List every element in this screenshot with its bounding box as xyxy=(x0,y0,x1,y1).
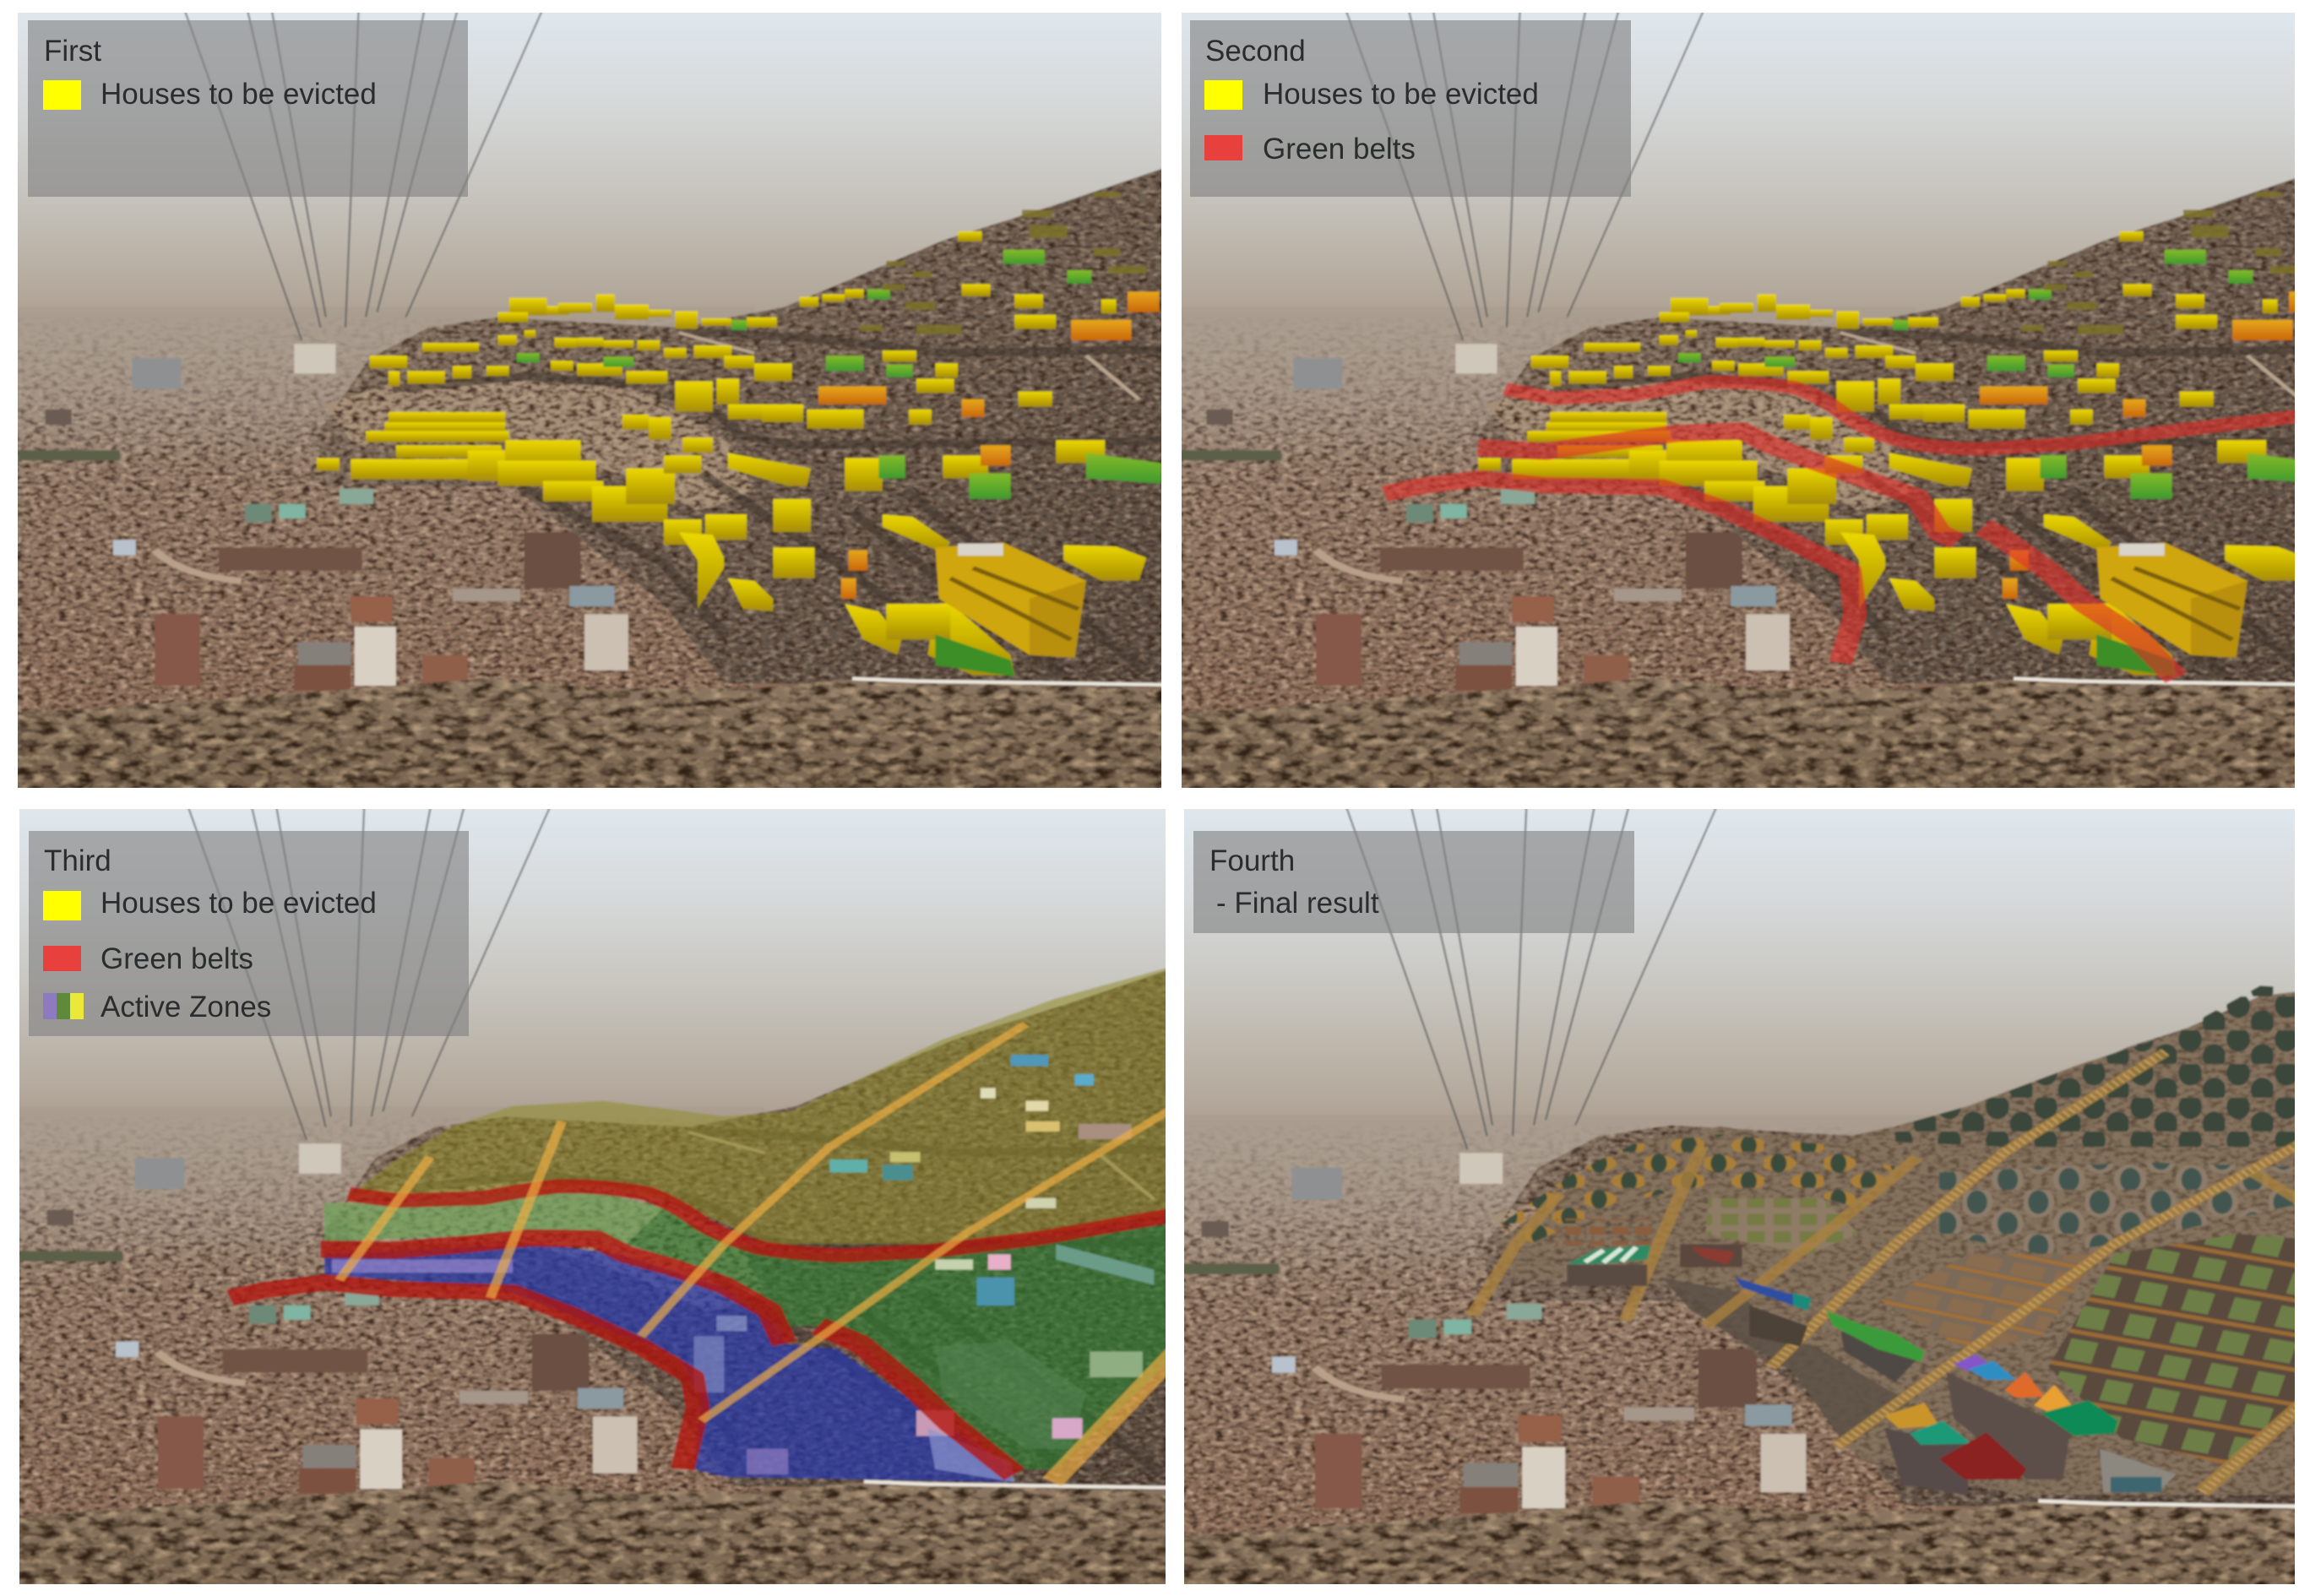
mid-slope trees xyxy=(1939,1162,2304,1254)
restored slope xyxy=(1494,991,2304,1495)
legend: Third: Green belts xyxy=(101,942,253,975)
green belts overlay xyxy=(1384,383,2304,678)
active zones overlay xyxy=(230,965,1177,1482)
orange terraced trees xyxy=(1494,1134,1895,1244)
teal and pale houses xyxy=(332,1055,1154,1482)
legend: Second: Second xyxy=(1205,35,1306,68)
legend: Fourth: - Final result xyxy=(1216,887,1379,920)
circulation stripes xyxy=(340,1024,1177,1482)
tree-covered upper slope xyxy=(1895,985,2304,1147)
legend: Fourth xyxy=(1193,831,1634,933)
stairs xyxy=(1472,1052,2304,1492)
dark ground xyxy=(1662,1278,1910,1444)
panel: Third xyxy=(19,809,1166,1584)
garden plots xyxy=(2048,1234,2304,1464)
photo: hillside with active zones xyxy=(19,809,1166,1584)
legend: Third: Third xyxy=(44,844,111,877)
panel: Fourth xyxy=(1155,795,2310,1596)
photo: hillside with houses and green belts xyxy=(1182,13,2295,788)
legend: First: Houses to be evicted xyxy=(101,78,377,111)
panel: First xyxy=(18,13,1161,788)
legend: First xyxy=(28,20,468,197)
green belts xyxy=(230,1186,1177,1474)
legend: Third: Active Zones xyxy=(101,991,271,1023)
legend: First: First xyxy=(44,35,101,68)
market stalls xyxy=(1567,1244,2177,1495)
legend: Second: Houses to be evicted xyxy=(1263,78,1539,111)
panel: Second xyxy=(1182,13,2295,788)
legend: Third xyxy=(29,831,469,1036)
legend: Fourth: Fourth xyxy=(1209,844,1295,877)
legend: Second: Green belts xyxy=(1263,133,1416,166)
legend: Third: Houses to be evicted xyxy=(101,887,377,920)
legend: Second xyxy=(1190,20,1631,197)
photo: final result with trees, plots and market stalls xyxy=(1155,795,2310,1596)
photo: hillside with houses to be evicted highlighted xyxy=(18,13,1161,788)
